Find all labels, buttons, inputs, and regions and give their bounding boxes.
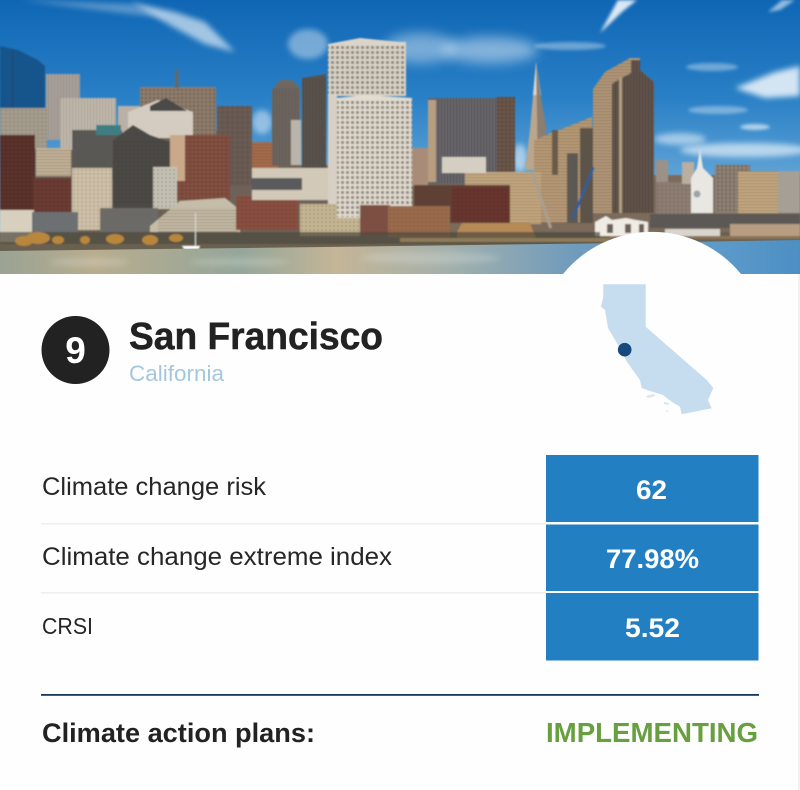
row: CRSI: 5.52 — [625, 613, 680, 643]
row: CRSI: CRSI — [42, 613, 93, 639]
row: climate change risk: 62 — [636, 475, 667, 505]
water — [0, 240, 800, 274]
tall white tower — [328, 38, 406, 96]
rank badge: 9 — [65, 330, 86, 371]
row: climate change extreme index — [42, 524, 758, 591]
status: implementing: IMPLEMENTING — [546, 717, 758, 748]
divider rule — [41, 694, 759, 696]
row: climate change extreme index: Climate change extreme index — [42, 543, 393, 571]
label: climate action plans: Climate action plans: — [42, 718, 315, 748]
icon: California map with location dot — [601, 284, 713, 414]
table: climate metrics — [41, 455, 758, 660]
buildings — [0, 38, 800, 254]
waterfront — [650, 214, 800, 228]
underlay of dense city blocks — [0, 130, 330, 235]
sub-heading: state name: California — [129, 361, 225, 386]
row: climate change risk — [42, 455, 758, 522]
row: CRSI — [42, 593, 758, 660]
clouds — [20, 0, 800, 172]
row: climate change extreme index: 77.98% — [606, 544, 699, 574]
panel: card background — [0, 274, 800, 790]
map dome: white circle behind the map — [563, 232, 741, 274]
far left — [0, 46, 45, 112]
rank badge — [42, 316, 110, 384]
foreground trees — [0, 232, 600, 244]
row: climate change risk: Climate change risk — [42, 473, 267, 501]
centre right — [412, 148, 428, 186]
heading: city name: San Francisco — [129, 316, 383, 358]
photo: San Francisco skyline — [0, 0, 800, 274]
right edge shadow — [798, 274, 800, 790]
sky — [0, 0, 800, 245]
right of tower — [656, 160, 668, 215]
